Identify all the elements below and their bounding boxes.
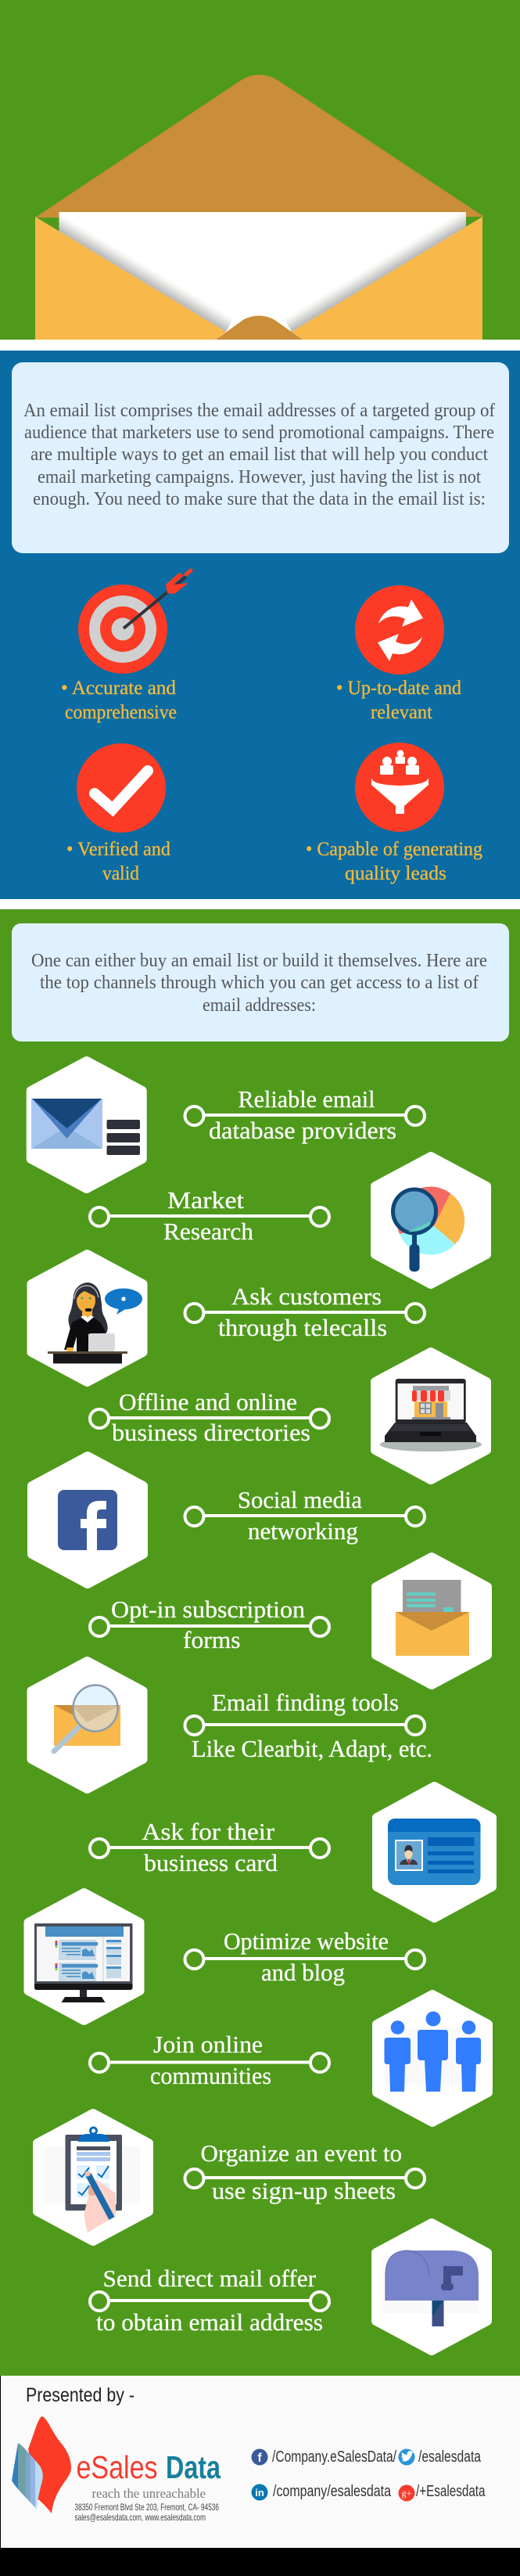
intro text panel: audience that marketers use to send promotional campaigns. There — [24, 423, 494, 443]
label: quality leads — [306, 839, 482, 884]
hexagon 4 with laptop storefront icon — [375, 1352, 486, 1480]
label 5: networking — [248, 1517, 358, 1545]
label 11: use sign-up sheets — [212, 2177, 396, 2204]
label 9: Optimize website — [224, 1927, 389, 1955]
intro text panel: enough. You need to make sure that the data in the email list is: — [33, 489, 486, 509]
label 9 — [224, 1927, 389, 1986]
hexagon 7 with envelope under magnifier icon — [31, 1661, 142, 1789]
label 7: Email finding tools — [212, 1689, 399, 1716]
label: quality leads: • Capable of generating — [306, 839, 482, 860]
channel 1: reliable email database providers — [31, 1061, 425, 1189]
logo wordmark: sales@esalesdata.com, www.esalesdata.com — [75, 2512, 206, 2523]
speech bubble — [105, 1288, 142, 1315]
hexagon 2 with pie and magnifier icon — [375, 1157, 486, 1284]
social: linkedin: /company/esalesdata — [273, 2483, 392, 2500]
label 1: Reliable email — [238, 1085, 375, 1113]
envelope front left panel — [35, 217, 226, 340]
hexagon 1 with envelope list icon — [31, 1061, 142, 1189]
connector 10 — [90, 2053, 329, 2072]
label: quality leads: quality leads — [345, 863, 446, 884]
label 2 — [163, 1186, 253, 1245]
intro text panel: An email list comprises the email addresses of a targeted group of — [23, 401, 495, 421]
channel 4: offline and online business directories — [90, 1352, 486, 1480]
label 10: communities — [150, 2062, 271, 2089]
intro text panel: email marketing campaigns. However, just having the list is not — [38, 467, 481, 487]
label 2: Research — [163, 1218, 253, 1245]
social: facebook — [252, 2448, 396, 2466]
social: google plus: g+ — [402, 2488, 412, 2499]
label 7: Like Clearbit, Adapt, etc. — [192, 1735, 432, 1762]
channel 3: ask customers through telecalls — [31, 1254, 425, 1382]
connector 4 — [90, 1409, 329, 1428]
label 3: through telecalls — [218, 1314, 387, 1341]
icon: target with arrow — [78, 570, 191, 674]
logo wordmark: eSales — [77, 2449, 158, 2485]
connector 2 — [90, 1207, 329, 1226]
connector 8 — [90, 1839, 329, 1858]
label 1: database providers — [209, 1117, 396, 1144]
connector 11 — [185, 2169, 425, 2188]
label 10: Join online — [153, 2031, 263, 2058]
social: google plus: /+Esalesdata — [416, 2483, 486, 2500]
channel 6: opt-in subscription forms — [90, 1557, 487, 1685]
green section: channels — [0, 909, 520, 2376]
social: twitter: /esalesdata — [418, 2448, 482, 2466]
social: facebook: f — [257, 2452, 262, 2465]
header section: green banner with envelope — [0, 0, 520, 351]
hexagon 8 with ID card icon — [377, 1786, 492, 1918]
envelope back flap — [35, 75, 484, 218]
label 5 — [238, 1486, 362, 1545]
label: accurate: comprehensive — [65, 702, 177, 723]
label 1 — [209, 1085, 396, 1144]
hexagon 6 with form envelope icon — [376, 1557, 487, 1685]
social: linkedin — [252, 2483, 392, 2501]
label 2: Market — [167, 1186, 244, 1214]
label: up to date: • Up-to-date and — [336, 678, 461, 699]
logo mark — [12, 2416, 71, 2513]
channel 8: ask for business card — [90, 1786, 492, 1918]
label: verified: valid — [102, 863, 139, 884]
label 8: Ask for their — [142, 1818, 275, 1845]
blue section — [0, 351, 520, 899]
hexagon 5 with facebook icon — [32, 1456, 143, 1584]
channels intro panel — [12, 923, 509, 1042]
label 8 — [142, 1818, 278, 1876]
label 4: Offline and online — [119, 1388, 297, 1416]
channels intro panel: One can either buy an email list or build it themselves. Here are — [31, 951, 487, 971]
hexagon 10 with people icon — [377, 1995, 488, 2122]
channels intro panel: email addresses: — [203, 995, 316, 1016]
label 6: forms — [183, 1626, 241, 1653]
label: accurate: • Accurate and — [61, 678, 176, 699]
label 6: Opt-in subscription — [111, 1596, 306, 1623]
envelope bottom tab — [216, 316, 303, 340]
logo wordmark: 38350 Fremont Blvd Ste 203, Fremont, CA- 94536 — [75, 2502, 219, 2513]
hexagon 12 with mailbox icon — [376, 2223, 487, 2351]
label 3: Ask customers — [231, 1283, 382, 1310]
social: google plus — [399, 2483, 486, 2501]
connector 3 — [185, 1304, 425, 1322]
logo wordmark: Data — [166, 2449, 221, 2485]
label 4: business directories — [112, 1419, 310, 1446]
label 12 — [96, 2265, 323, 2336]
label 7 — [192, 1689, 432, 1762]
label 11: Organize an event to — [200, 2139, 402, 2167]
label 5: Social media — [238, 1486, 362, 1513]
label 6 — [111, 1596, 306, 1653]
social: linkedin: in — [255, 2487, 264, 2499]
label 11 — [200, 2139, 402, 2204]
connector 9 — [185, 1950, 425, 1969]
footer panel — [1, 2376, 520, 2548]
envelope front right panel — [292, 217, 482, 340]
label: up to date: relevant — [371, 702, 432, 723]
label 4 — [112, 1388, 310, 1446]
connector 12 — [90, 2292, 329, 2311]
hexagon 11 with clipboard icon — [38, 2114, 149, 2241]
connector 5 — [185, 1507, 425, 1526]
label 12: to obtain email address — [96, 2308, 323, 2336]
icon: lead funnel — [355, 743, 444, 832]
label: accurate — [61, 678, 177, 723]
channel 10: join online communities — [90, 1995, 488, 2122]
label: up to date — [336, 678, 461, 723]
label 12: Send direct mail offer — [103, 2265, 317, 2292]
channel 5: social media networking — [32, 1456, 425, 1584]
channels intro panel: the top channels through which you can get access to a list of — [40, 973, 479, 993]
channel 9: optimize website and blog — [28, 1893, 425, 2020]
connector 6 — [90, 1617, 329, 1636]
label 8: business card — [144, 1849, 278, 1876]
connector 7 — [185, 1716, 425, 1735]
label: verified — [66, 839, 170, 884]
hexagon 9 with monitor icon — [28, 1893, 139, 2020]
channel 2: market research — [90, 1157, 486, 1284]
channel 11: organize an event sign-up sheets — [38, 2114, 425, 2241]
icon: check mark — [77, 743, 166, 833]
logo wordmark: reach the unreachable — [92, 2486, 206, 2501]
connector 1 — [185, 1106, 425, 1125]
logo wordmark — [75, 2449, 221, 2523]
label 9: and blog — [261, 1959, 345, 1986]
label: verified: • Verified and — [66, 839, 170, 860]
white divider band — [0, 899, 520, 909]
intro text panel: are multiple ways to get an email list that will help you conduct — [30, 444, 488, 465]
label 10 — [150, 2031, 271, 2089]
label 3 — [218, 1283, 387, 1341]
letter paper — [59, 212, 466, 340]
channel 12: direct mail offer — [90, 2223, 487, 2351]
presented by heading: Presented by - — [26, 2384, 134, 2406]
channel 7: email finding tools — [31, 1661, 432, 1789]
icon: refresh arrows — [355, 585, 444, 675]
social: twitter — [399, 2448, 482, 2466]
intro text panel — [12, 362, 509, 553]
social: facebook: /Company.eSalesData/ — [272, 2448, 396, 2466]
hexagon 3 with call agent icon — [31, 1254, 142, 1382]
